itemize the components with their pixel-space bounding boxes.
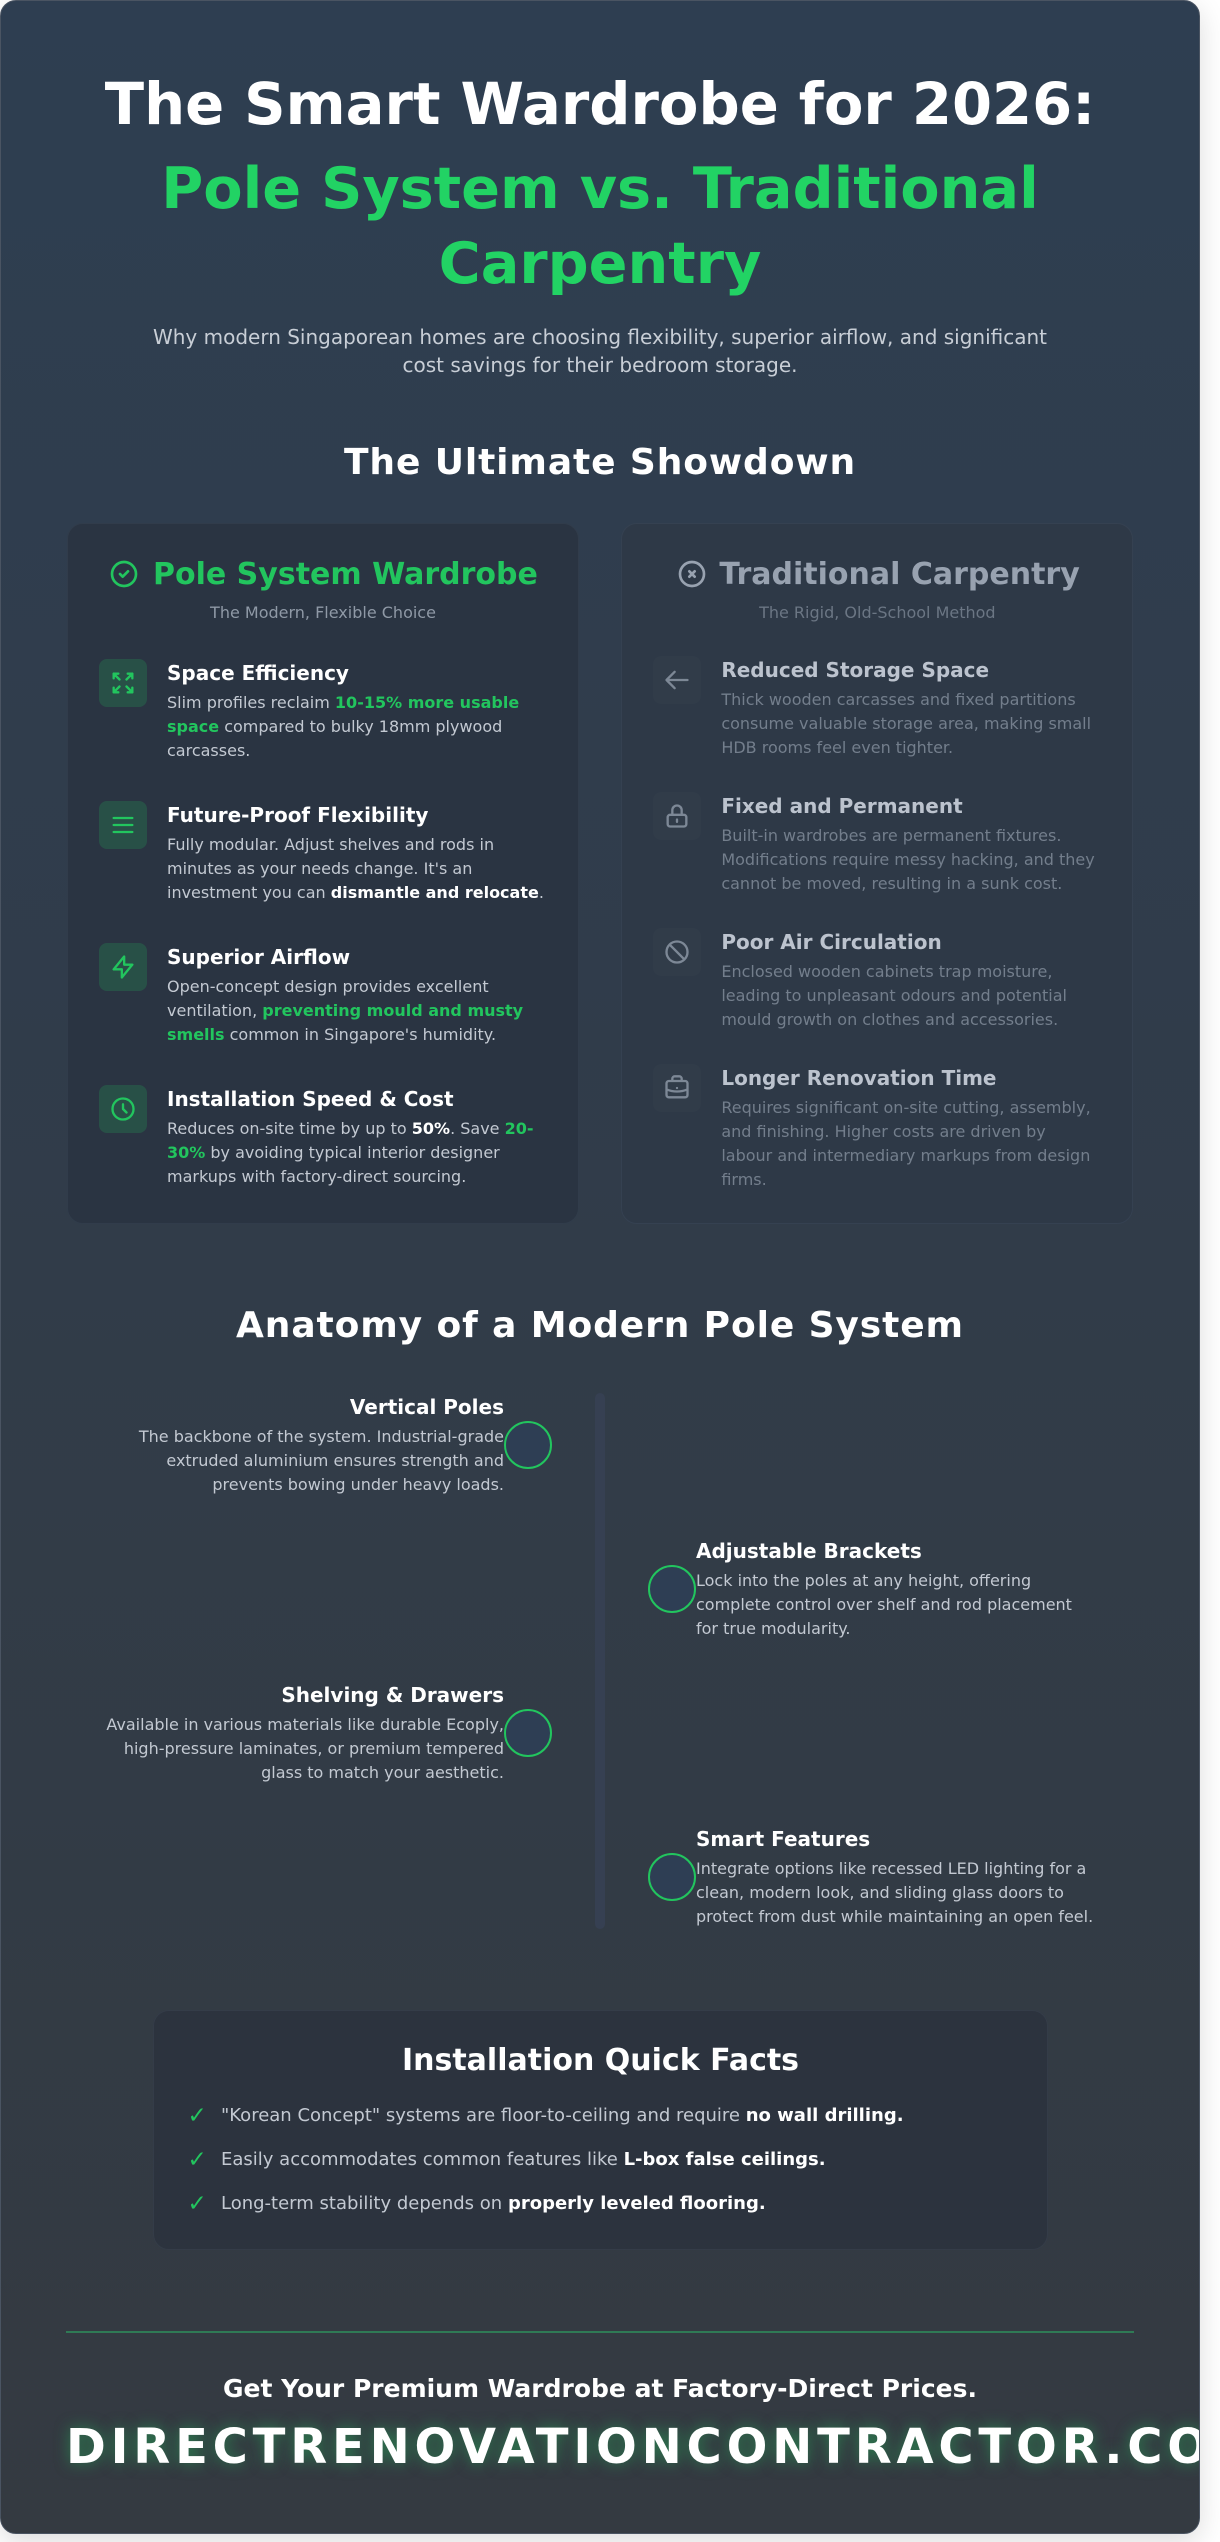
feature: future-proof flexibility: investment you can dismantle and relocate. [167,883,544,902]
panel: installation quick facts [153,2010,1048,2250]
feature: reduced storage space: Reduced Storage Space [721,658,989,682]
panel heading: traditional: Traditional Carpentry [719,557,1080,592]
callout: vertical poles: Vertical Poles [350,1395,504,1419]
feature: reduced storage space: Thick wooden carcasses and fixed partitions [721,690,1076,709]
feature: poor air circulation: mould growth on clothes and accessories. [721,1010,1058,1029]
callout: shelving and drawers: Available in various materials like durable Ecoply, [106,1715,504,1734]
icon: expand arrows [99,659,147,707]
feature: fixed and permanent: Modifications require messy hacking, and they [721,850,1095,869]
callout: smart features: protect from dust while maintaining an open feel. [696,1907,1093,1926]
callout: vertical poles [138,1395,552,1494]
callout: smart features: Smart Features [696,1827,870,1851]
subtitle: cost savings for their bedroom storage. [402,353,798,377]
title block [105,71,1095,297]
title block: Pole System vs. Traditional [161,155,1039,222]
feature: poor air circulation [665,930,1067,1029]
footer tagline: Get Your Premium Wardrobe at Factory-Direct Prices. [223,2374,977,2403]
callout: vertical poles: The backbone of the system. Industrial-grade [139,1427,504,1446]
fact: leveled flooring: Long-term stability depends on properly leveled flooring. [221,2193,766,2214]
feature: poor air circulation: leading to unpleasant odours and potential [721,986,1067,1005]
callout: smart features: Integrate options like recessed LED lighting for a [696,1859,1086,1878]
callout: adjustable brackets: Adjustable Brackets [696,1539,922,1563]
icon: x circle [678,560,706,588]
feature: installation speed and cost: Reduces on-site time by up to 50%. Save 20- [167,1119,534,1138]
feature: superior airflow: Open-concept design provides excellent [167,977,489,996]
marker [504,1709,552,1757]
feature: poor air circulation: Enclosed wooden cabinets trap moisture, [721,962,1052,981]
feature: longer renovation time: and finishing. Higher costs are driven by [721,1122,1046,1141]
fact: no wall drilling: "Korean Concept" systems are floor-to-ceiling and require no wall drilling. [221,2105,904,2126]
feature: fixed and permanent: cannot be moved, resulting in a sunk cost. [721,874,1062,893]
feature: longer renovation time: Longer Renovation Time [721,1066,996,1090]
callout: vertical poles: extruded aluminium ensures strength and [166,1451,504,1470]
title block: Carpentry [439,230,761,297]
feature: reduced storage space: consume valuable storage area, making small [721,714,1091,733]
feature: installation speed and cost: Installation Speed & Cost [167,1087,454,1111]
feature: reduced storage space: HDB rooms feel even tighter. [721,738,953,757]
marker [648,1853,696,1901]
feature: superior airflow: ventilation, preventing mould and musty [167,1001,523,1020]
feature: future-proof flexibility [99,801,544,902]
panel: traditional carpentry [621,523,1133,1224]
panel heading: pole system: Pole System Wardrobe [153,557,538,592]
panel subtitle: The Rigid, Old-School Method [759,603,996,622]
feature: reduced storage space [665,658,1091,757]
panel: pole system wardrobe [67,523,579,1224]
fact: no wall drilling: ✓ [188,2103,207,2129]
fact: leveled flooring: ✓ [188,2191,207,2217]
icon: menu lines [99,801,147,849]
callout: adjustable brackets: Lock into the poles at any height, offering [696,1571,1031,1590]
title block: The Smart Wardrobe for 2026: [105,71,1095,138]
panel heading: Installation Quick Facts [402,2043,799,2078]
icon: lock [653,792,701,840]
fact: l-box ceilings: Easily accommodates common features like L-box false ceilings. [221,2149,826,2170]
feature: longer renovation time [665,1066,1091,1189]
feature: poor air circulation: Poor Air Circulation [721,930,942,954]
heading: anatomy: Anatomy of a Modern Pole System [236,1305,964,1346]
callout: shelving and drawers: high-pressure laminates, or premium tempered [124,1739,504,1758]
feature: future-proof flexibility: minutes as your needs change. It's an [167,859,472,878]
heading: the ultimate showdown: The Ultimate Showdown [344,442,856,483]
callout: smart features [648,1827,1093,1926]
feature: space efficiency: Slim profiles reclaim 10-15% more usable [167,693,519,712]
callout: adjustable brackets [648,1539,1072,1638]
callout: shelving and drawers [106,1683,552,1782]
callout: shelving and drawers: glass to match your aesthetic. [261,1763,504,1782]
feature: fixed and permanent [666,794,1095,893]
feature: superior airflow: smells common in Singapore's humidity. [167,1025,496,1044]
feature: future-proof flexibility: Future-Proof Flexibility [167,803,428,827]
fact: l-box ceilings: ✓ [188,2147,207,2173]
feature: fixed and permanent: Fixed and Permanent [721,794,963,818]
feature: superior airflow [99,943,523,1044]
marker [648,1565,696,1613]
feature: space efficiency [99,659,519,760]
feature: longer renovation time: firms. [721,1170,767,1189]
icon: briefcase [653,1064,701,1112]
subtitle: Why modern Singaporean homes are choosing flexibility, superior airflow, and significant [153,325,1047,349]
panel subtitle: The Modern, Flexible Choice [210,603,436,622]
callout: smart features: clean, modern look, and sliding glass doors to [696,1883,1064,1902]
icon: arrow left [653,656,701,704]
icon: ban [653,928,701,976]
feature: superior airflow: Superior Airflow [167,945,350,969]
feature: space efficiency: carcasses. [167,741,250,760]
feature: fixed and permanent: Built-in wardrobes are permanent fixtures. [721,826,1061,845]
callout: shelving and drawers: Shelving & Drawers [281,1683,504,1707]
callout: adjustable brackets: for true modularity. [696,1619,850,1638]
callout: adjustable brackets: complete control over shelf and rod placement [696,1595,1072,1614]
feature: space efficiency: Space Efficiency [167,661,349,685]
feature: installation speed and cost [99,1085,534,1186]
icon: clock [99,1085,147,1133]
marker [504,1421,552,1469]
feature: space efficiency: space compared to bulky 18mm plywood [167,717,502,736]
feature: longer renovation time: labour and intermediary markups from design [721,1146,1090,1165]
feature: installation speed and cost: 30% by avoiding typical interior designer [167,1143,500,1162]
icon: lightning bolt [99,943,147,991]
feature: installation speed and cost: markups with factory-direct sourcing. [167,1167,466,1186]
feature: future-proof flexibility: Fully modular. Adjust shelves and rods in [167,835,494,854]
feature: longer renovation time: Requires significant on-site cutting, assembly, [721,1098,1091,1117]
callout: vertical poles: prevents bowing under heavy loads. [212,1475,504,1494]
icon: check circle [110,560,138,588]
diagram: pole anatomy [106,1394,1093,1929]
subtitle [153,325,1047,377]
central pole [595,1393,605,1929]
